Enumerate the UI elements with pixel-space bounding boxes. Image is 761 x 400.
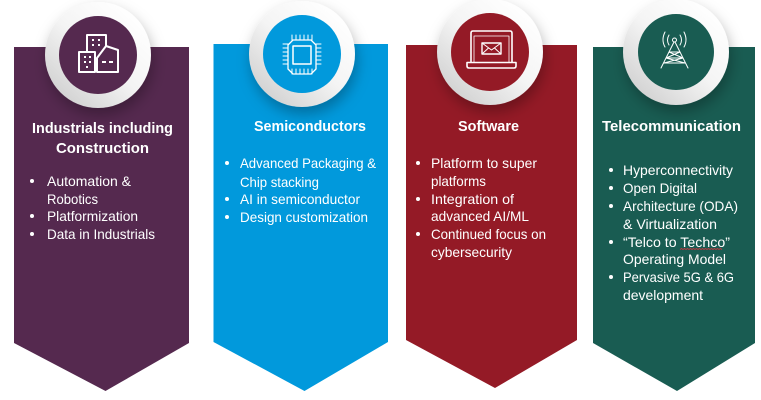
bullet list: telecommunication: development	[623, 287, 703, 303]
panel shape: semiconductors	[214, 44, 388, 391]
bullet list: industrials: Platformization	[47, 208, 138, 224]
icon badge: industrials	[45, 2, 151, 108]
bullet list: software: platforms	[431, 173, 486, 189]
heading: telecommunication: Telecommunication	[602, 118, 741, 135]
bullet list: software: Continued focus on	[431, 226, 546, 242]
bullet list: telecommunication: Hyperconnectivity	[623, 162, 733, 178]
heading: industrials: Industrials including	[32, 120, 173, 137]
bullet list: software: advanced AI/ML	[431, 208, 529, 224]
bullet list: industrials: Robotics	[47, 191, 98, 207]
panel: telecommunication	[593, 0, 755, 391]
bullet list: telecommunication: & Virtualization	[623, 216, 717, 232]
bullet list: semiconductors: Design customization	[240, 209, 368, 225]
heading: software: Software	[458, 118, 519, 135]
bullet list: telecommunication	[609, 162, 738, 303]
bullet list: semiconductors: Chip stacking	[240, 174, 319, 190]
icon: laptop with envelope	[467, 31, 516, 68]
bullet list: telecommunication: Open Digital	[623, 180, 697, 196]
bullet list: semiconductors: Advanced Packaging &	[240, 155, 377, 171]
icon badge: telecommunication	[623, 0, 729, 105]
bullet list: software: Platform to super	[431, 155, 537, 171]
bullet list: software: cybersecurity	[431, 244, 512, 260]
panel: industrials including construction	[14, 2, 189, 391]
panel shape: telecommunication	[593, 47, 755, 391]
icon: buildings	[79, 35, 118, 72]
bullet list: telecommunication: Operating Model	[623, 251, 726, 267]
bullet list: telecommunication: Architecture (ODA)	[623, 198, 738, 214]
heading: industrials: Construction	[56, 140, 149, 157]
heading: industrials	[32, 120, 173, 157]
panel: software	[406, 0, 577, 388]
bullet list: industrials	[30, 173, 155, 242]
bullet list: industrials: Automation &	[47, 173, 132, 189]
bullet list: software: Integration of	[431, 191, 514, 207]
icon badge: semiconductors	[249, 1, 355, 107]
panel shape: industrials	[14, 47, 189, 391]
bullet list: software	[416, 155, 546, 260]
panel shape: software	[406, 45, 577, 388]
bullet list: semiconductors	[225, 155, 377, 225]
panel: semiconductors	[214, 1, 388, 391]
icon badge: software	[437, 0, 543, 105]
bullet list: telecommunication: “Telco to Techco”	[623, 234, 730, 250]
icon: microchip	[283, 35, 321, 74]
bullet list: industrials: Data in Industrials	[47, 226, 155, 242]
bullet list: telecommunication: Pervasive 5G & 6G	[623, 269, 734, 285]
heading: semiconductors: Semiconductors	[254, 118, 366, 135]
icon: signal tower	[661, 32, 688, 68]
bullet list: semiconductors: AI in semiconductor	[240, 191, 360, 207]
